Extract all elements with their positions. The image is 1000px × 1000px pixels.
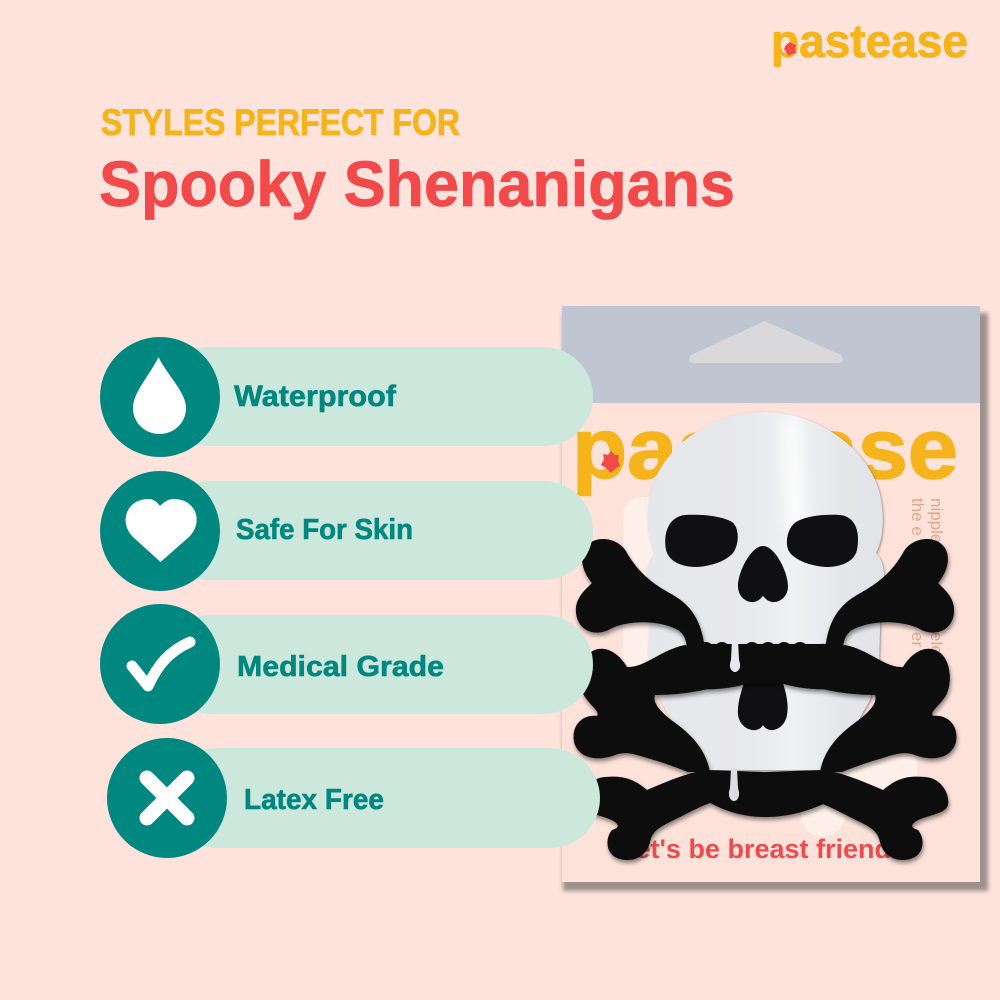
feature: safe for skin [100, 471, 593, 591]
product package [562, 306, 988, 891]
satin highlight [780, 418, 808, 530]
icon circle [107, 738, 227, 858]
pill [160, 615, 593, 714]
upper skull drip [730, 640, 740, 672]
icon circle [100, 337, 220, 457]
package logo: pastease [572, 402, 958, 497]
icon circle [100, 604, 220, 724]
skull nose [738, 546, 788, 602]
side copy: er [908, 632, 927, 647]
icon circle [100, 471, 220, 591]
upper centre bar [655, 644, 875, 689]
label: Latex Free [244, 784, 384, 816]
icon: check mark [132, 642, 190, 686]
label: Waterproof [234, 380, 397, 413]
brand logo: pastease [771, 15, 968, 67]
side copy [908, 498, 946, 655]
side copy: nipple [927, 498, 946, 543]
side copy: e [927, 576, 946, 585]
right bones [765, 539, 956, 860]
pill [160, 347, 593, 446]
icon: water drop [133, 357, 186, 434]
lower skull nose [738, 680, 788, 730]
lower skull drip [729, 768, 739, 801]
lower centre bar [700, 772, 828, 817]
label: Safe For Skin [236, 514, 413, 546]
pill [167, 748, 600, 848]
skull eyes [665, 515, 858, 567]
eyebrow heading: STYLES PERFECT FOR [101, 102, 460, 143]
package shadow [563, 313, 988, 891]
upper bar scallops [698, 642, 808, 658]
icon: cross [147, 778, 187, 818]
pill [160, 481, 593, 580]
hang hole [689, 321, 843, 363]
pale background shapes [623, 497, 917, 837]
left bones [574, 539, 765, 860]
feature: medical grade [100, 604, 593, 724]
icon: heart [126, 499, 197, 562]
feature: waterproof [100, 337, 593, 457]
package header band [562, 306, 980, 403]
main title: Spooky Shenanigans [99, 148, 735, 220]
side copy: ele [927, 632, 946, 655]
crossbones [574, 539, 956, 860]
side copy: the e [908, 498, 927, 536]
lower bar scallops [699, 772, 817, 786]
package card [562, 306, 980, 882]
package tagline: let's be breast friends [628, 834, 906, 864]
white skull [646, 412, 884, 770]
label: Medical Grade [237, 651, 444, 683]
feature: latex free [107, 738, 600, 858]
